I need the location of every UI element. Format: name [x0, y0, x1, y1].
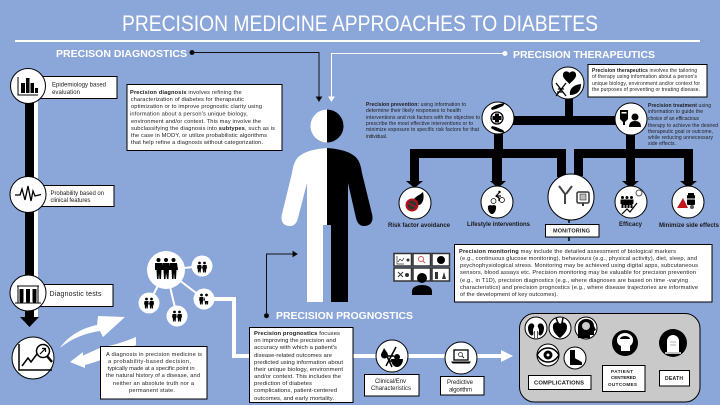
- label: probability: clinical features: [50, 198, 90, 204]
- icon: therapeutics heart dna leaf: [552, 67, 584, 99]
- icon: pulse: [10, 176, 46, 212]
- icon: brain head: [575, 317, 597, 339]
- title: PRECISION MEDICINE APPROACHES TO DIABETES: [122, 11, 598, 36]
- label: risk factor avoidance: Risk factor avoidance: [388, 223, 451, 229]
- label: epidemiology: Epidemiology based: [52, 82, 106, 88]
- arrow: diagnostics to person: [190, 50, 322, 101]
- text: precision treatment: [648, 103, 718, 147]
- probability decision box: A diagnosis in precision medicine is: [106, 352, 202, 358]
- diagnosis text box: the case in MODY, or utilize probabilistic algorithms: [131, 133, 267, 139]
- icon: bar chart: [10, 68, 46, 104]
- label: complications: [528, 376, 591, 390]
- label: patient centered outcomes: CENTERED: [611, 375, 637, 380]
- arrow: prognostics to person: [264, 252, 297, 318]
- therapeutics text box: [588, 64, 707, 97]
- prognostics text box: accuracy with which a patient's: [254, 345, 337, 351]
- label: probability: Probability based on: [50, 191, 104, 197]
- label: death: DEATH: [665, 376, 683, 382]
- text: precision prevention: Precision prevention: using information to: [366, 102, 466, 108]
- label: minimize side effects: Minimize side effects: [659, 223, 720, 229]
- connector: network to outcomes arrow: [205, 299, 513, 362]
- diagnosis text box: environment and/or context. This may involve the: [131, 119, 261, 125]
- prognostics text box: predicted using information about: [254, 360, 343, 366]
- monitoring text box: of the development of key outcomes).: [460, 292, 558, 298]
- label: diagnostic tests: [40, 284, 113, 306]
- prognostics text box: their unique biology, environment: [254, 367, 343, 373]
- label: epidemiology: evaluation: [52, 90, 80, 96]
- text: precision prevention: interventions and risk factors with the objective to: [366, 115, 480, 121]
- icon: prevention hands: [482, 102, 514, 134]
- label: predictive algorithm: Predictive: [447, 380, 474, 386]
- label: complications: COMPLICATIONS: [534, 380, 584, 386]
- prognostics text box: complications, patient-centered: [254, 388, 337, 394]
- diagnosis text box: Precision diagnosis involves refining the: [130, 90, 242, 96]
- text: precision treatment: while reducing unnecessary: [648, 135, 714, 141]
- probability decision box: neither an absolute truth nor a: [113, 381, 195, 387]
- label: lifestyle interventions: Lifestyle interventions: [467, 222, 531, 228]
- monitoring text box: Precision monitoring may include the detailed assessment of biological markers: [459, 249, 676, 255]
- icon: chart with magnifier: [12, 337, 54, 379]
- prognostics text box: and/or context. This includes the: [254, 374, 342, 380]
- label: patient centered outcomes: [602, 366, 645, 392]
- text: precision prevention: individual.: [366, 134, 387, 140]
- text: precision prevention: [366, 102, 480, 140]
- diagnosis text box: information about a person's unique biology,: [130, 111, 248, 117]
- person figure half white half black: [281, 110, 373, 302]
- curved arrow: up: [60, 316, 125, 348]
- label: diagnostic tests: Diagnostic tests: [50, 291, 102, 298]
- label: monitoring: MONITORING: [553, 228, 590, 234]
- curved arrow: down: [70, 337, 136, 368]
- icon: tombstone: [659, 329, 687, 357]
- monitoring text box: sensors, blood assays etc. Precision monitoring may be valuable for precision prevention: [460, 270, 696, 276]
- icon: risk factor: [399, 187, 431, 219]
- probability decision box: the natural history of a disease, and: [106, 373, 200, 379]
- text: precision treatment: Precision treatment using: [648, 103, 711, 109]
- arrow: therapeutics to person: [329, 52, 507, 101]
- icon: heart: [549, 317, 571, 339]
- label: clinical env: Characteristics: [371, 386, 411, 392]
- diagnosis text box: characterization of diabetes for therapeutic: [131, 97, 244, 103]
- prognostics text box: on improving the precision and: [254, 338, 336, 344]
- icon: foot: [564, 347, 586, 369]
- panel: outcomes: [520, 314, 700, 402]
- therapeutics text box: of therapy using information about a person's: [592, 74, 698, 80]
- icon: eye: [537, 344, 559, 366]
- text: precision prevention: determine their likely responses to health: [366, 108, 461, 114]
- text: precision prevention: prescribe the most effective interventions or to: [366, 121, 473, 127]
- therapeutics text box: the purposes of preventing or treating disease.: [592, 87, 700, 93]
- icon: monitoring: [548, 174, 594, 220]
- probability decision box: typically made at a specific point in: [108, 366, 194, 372]
- diagnosis text box: that help refine a diagnosis without categorization.: [131, 140, 263, 146]
- prognostics text box: disease-related outcomes are: [254, 353, 333, 359]
- therapeutics text box: unique biology, environment and/or context for: [592, 81, 700, 87]
- probability decision box: permanent state.: [129, 388, 175, 394]
- monitoring text box: characteristics) and precision prognostics (e.g., where disease trajectories are informative: [460, 285, 698, 291]
- icon: efficacy: [615, 186, 647, 218]
- icon: test tubes: [10, 275, 46, 311]
- text: precision treatment: information to guide the: [648, 109, 703, 115]
- icon: remote monitoring screens: [394, 254, 450, 295]
- monitoring text box: [454, 244, 712, 302]
- prognostics text box: [250, 328, 353, 402]
- icon: lifestyle: [481, 186, 513, 218]
- therapeutics text box: Precision therapeutics involves the tailoring: [592, 68, 697, 74]
- text: precision treatment: side effects.: [648, 141, 676, 147]
- text: precision treatment: therapy to achieve the desired: [648, 123, 718, 129]
- heading: precision therapeutics: PRECISION THERAPEUTICS: [513, 49, 655, 61]
- monitoring text box: psychophysiological stress. Monitoring may be achieved using digital apps, subcutaneous: [460, 263, 698, 269]
- therapeutics tree connectors: [406, 98, 697, 188]
- diagnosis text box: subclassifying the diagnosis into subtypes, such as is: [131, 126, 275, 132]
- probability decision box: [100, 346, 207, 399]
- prognostics text box: prediction of diabetes: [254, 381, 312, 387]
- label: predictive algorithm: algorithm: [449, 388, 472, 394]
- label: efficacy: Efficacy: [619, 222, 643, 228]
- population network: [138, 251, 214, 326]
- label: epidemiology: [40, 76, 117, 98]
- diagnosis text box: optimization or to improve prognostic clarity using: [131, 104, 262, 110]
- label: patient centered outcomes: OUTCOMES: [608, 382, 637, 387]
- diagnostic pathway bar: [20, 100, 39, 327]
- diagnosis text box: [127, 84, 282, 150]
- label: predictive algorithm: [440, 376, 484, 395]
- icon: treatment iv and doctor: [615, 103, 647, 135]
- label: patient centered outcomes: PATIENT: [611, 369, 633, 374]
- text: precision prevention: minimize exposure to specific risk factors for that: [366, 127, 480, 133]
- icon: minimize side effects: [672, 186, 704, 218]
- arrow: monitoring to text: [568, 220, 570, 241]
- icon: clinical and environmental: [376, 340, 408, 372]
- heading: precision prognostics: PRECISION PROGNOSTICS: [276, 310, 413, 322]
- monitoring text box: (e.g., continuous glucose monitoring), behaviours (e.g., physical activity), diet, sleep, and: [460, 256, 697, 262]
- label: death: [660, 370, 690, 386]
- prognostics text box: outcomes, and early mortality.: [254, 396, 334, 402]
- heading: precision diagnostics: PRECISON DIAGNOSTICS: [56, 48, 187, 60]
- text: precision treatment: therapeutic goal or outcome,: [648, 129, 713, 135]
- icon: predictive algorithm laptop: [445, 342, 477, 374]
- prognostics text box: Precision prognostics focuses: [254, 331, 340, 337]
- probability decision box: a probability-based decision,: [108, 359, 191, 365]
- monitoring text box: (e.g., in T1D), precision diagnostics (e.g., where diagnoses are based on time -varying: [460, 278, 688, 284]
- label: monitoring: [546, 224, 599, 237]
- label: clinical env: Clinical/Env: [375, 379, 406, 385]
- label: clinical env: [364, 374, 419, 396]
- icon: patient head: [612, 330, 638, 356]
- label: probability: [40, 186, 114, 206]
- text: precision treatment: choice of an efficacious: [648, 116, 700, 122]
- icon: kidneys: [525, 317, 547, 339]
